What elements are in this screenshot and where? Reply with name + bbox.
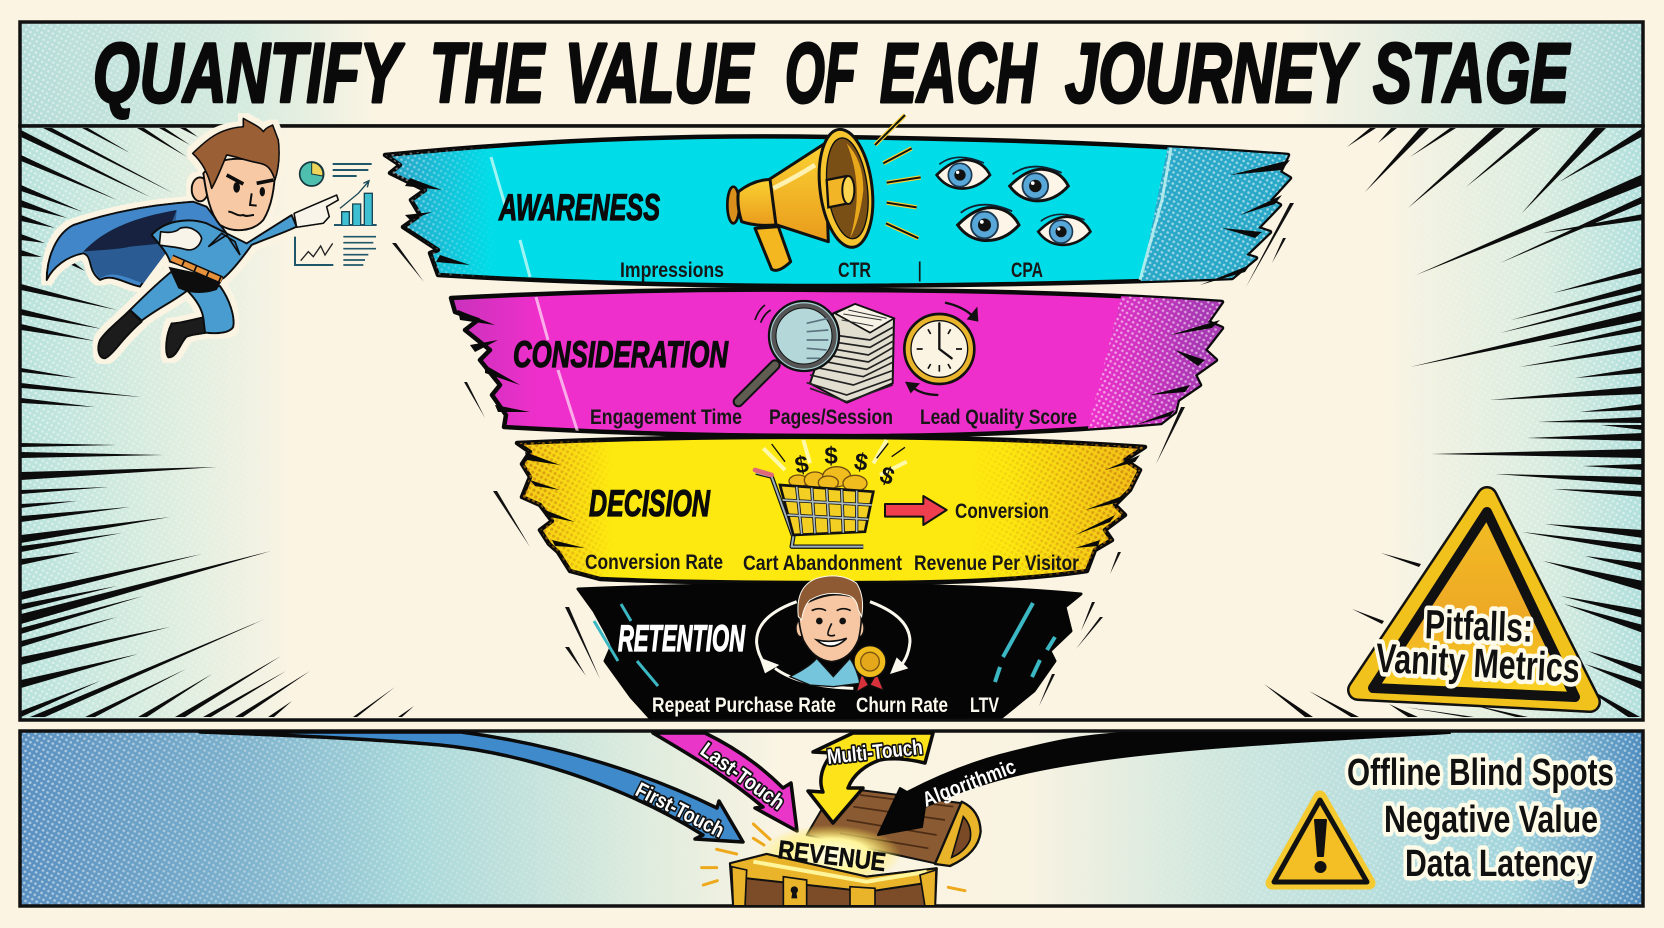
title xyxy=(93,26,1571,120)
treasure chest with revenue: REVENUE xyxy=(776,834,888,877)
metrics: consideration: Pages/Session xyxy=(769,406,893,429)
metrics: consideration xyxy=(590,406,1077,429)
icon: magnifier and papers xyxy=(738,301,894,403)
metrics: decision: Revenue Per Visitor xyxy=(914,552,1079,575)
label: awareness: AWARENESS xyxy=(498,187,660,228)
metrics: awareness: | xyxy=(917,259,922,282)
callout: pitfalls warning triangle: Vanity Metrics xyxy=(1375,635,1581,691)
icon: shopping cart with coins: $ xyxy=(852,448,870,477)
metrics: retention: Churn Rate xyxy=(856,694,948,717)
treasure chest with revenue xyxy=(702,790,981,907)
title: VALUE xyxy=(565,26,755,120)
metrics: decision: Cart Abandonment xyxy=(743,552,902,575)
icon: eyes xyxy=(937,157,1090,245)
icon: red arrow xyxy=(885,496,947,525)
metrics: consideration: Engagement Time xyxy=(590,406,742,429)
panel: funnel stage xyxy=(20,126,1643,720)
metrics: consideration: Lead Quality Score xyxy=(920,406,1077,429)
arrow: algorithmic xyxy=(878,733,1450,835)
label: consideration: CONSIDERATION xyxy=(513,334,729,375)
funnel stage: retention xyxy=(578,584,1081,718)
icon: customer with loop arrows and badge xyxy=(757,576,910,692)
funnel speed marks xyxy=(392,203,1294,706)
metrics: retention xyxy=(652,694,999,717)
icon: floating charts xyxy=(295,162,377,265)
label: retention: RETENTION xyxy=(618,618,746,659)
icon: warning sign xyxy=(1272,797,1369,883)
metrics: decision xyxy=(585,500,1079,575)
metrics: awareness: CPA xyxy=(1011,259,1043,282)
title: THE xyxy=(430,26,546,120)
metrics: decision: Conversion Rate xyxy=(585,551,723,574)
metrics: decision: Conversion xyxy=(955,500,1049,523)
title: OF xyxy=(785,26,858,120)
funnel stage: awareness xyxy=(385,130,1300,295)
list: attribution pitfalls xyxy=(1347,752,1614,885)
icon: clock xyxy=(904,303,978,395)
arrow: last-touch xyxy=(653,733,797,831)
metrics: awareness: CTR xyxy=(838,259,871,282)
list: attribution pitfalls: Negative Value xyxy=(1384,799,1598,841)
arrow: last-touch: Last-Touch xyxy=(696,738,789,815)
arrow: multi-touch: Multi-Touch xyxy=(826,736,924,769)
metrics: retention: Repeat Purchase Rate xyxy=(652,694,836,717)
metrics: awareness: Impressions xyxy=(620,259,724,282)
icon: shopping cart with coins xyxy=(755,440,907,547)
arrow: algorithmic: Algorithmic xyxy=(919,755,1019,812)
arrow: first-touch: First-Touch xyxy=(632,778,728,842)
icon: shopping cart with coins: $ xyxy=(876,461,898,491)
metrics: awareness xyxy=(620,259,1043,282)
arrow: multi-touch xyxy=(808,733,933,823)
label: decision: DECISION xyxy=(589,483,711,524)
arrow: first-touch xyxy=(200,732,743,842)
metrics: retention: LTV xyxy=(970,694,999,717)
character: superhero analyst xyxy=(47,118,338,358)
funnel stage: consideration xyxy=(451,285,1230,440)
title: EACH xyxy=(880,26,1038,120)
icon: megaphone xyxy=(727,115,921,270)
callout: pitfalls warning triangle: Pitfalls: xyxy=(1424,601,1534,651)
title: STAGE xyxy=(1373,26,1571,120)
icon: shopping cart with coins: $ xyxy=(793,451,811,480)
panel: title banner xyxy=(20,22,1643,126)
list: attribution pitfalls: Data Latency xyxy=(1405,843,1593,885)
panel: attribution footer xyxy=(20,731,1643,906)
icon: shopping cart with coins: $ xyxy=(824,442,838,469)
title: QUANTIFY xyxy=(93,26,405,120)
funnel stage: decision xyxy=(515,437,1150,587)
callout: pitfalls warning triangle xyxy=(1358,497,1590,702)
title: JOURNEY xyxy=(1065,26,1360,120)
